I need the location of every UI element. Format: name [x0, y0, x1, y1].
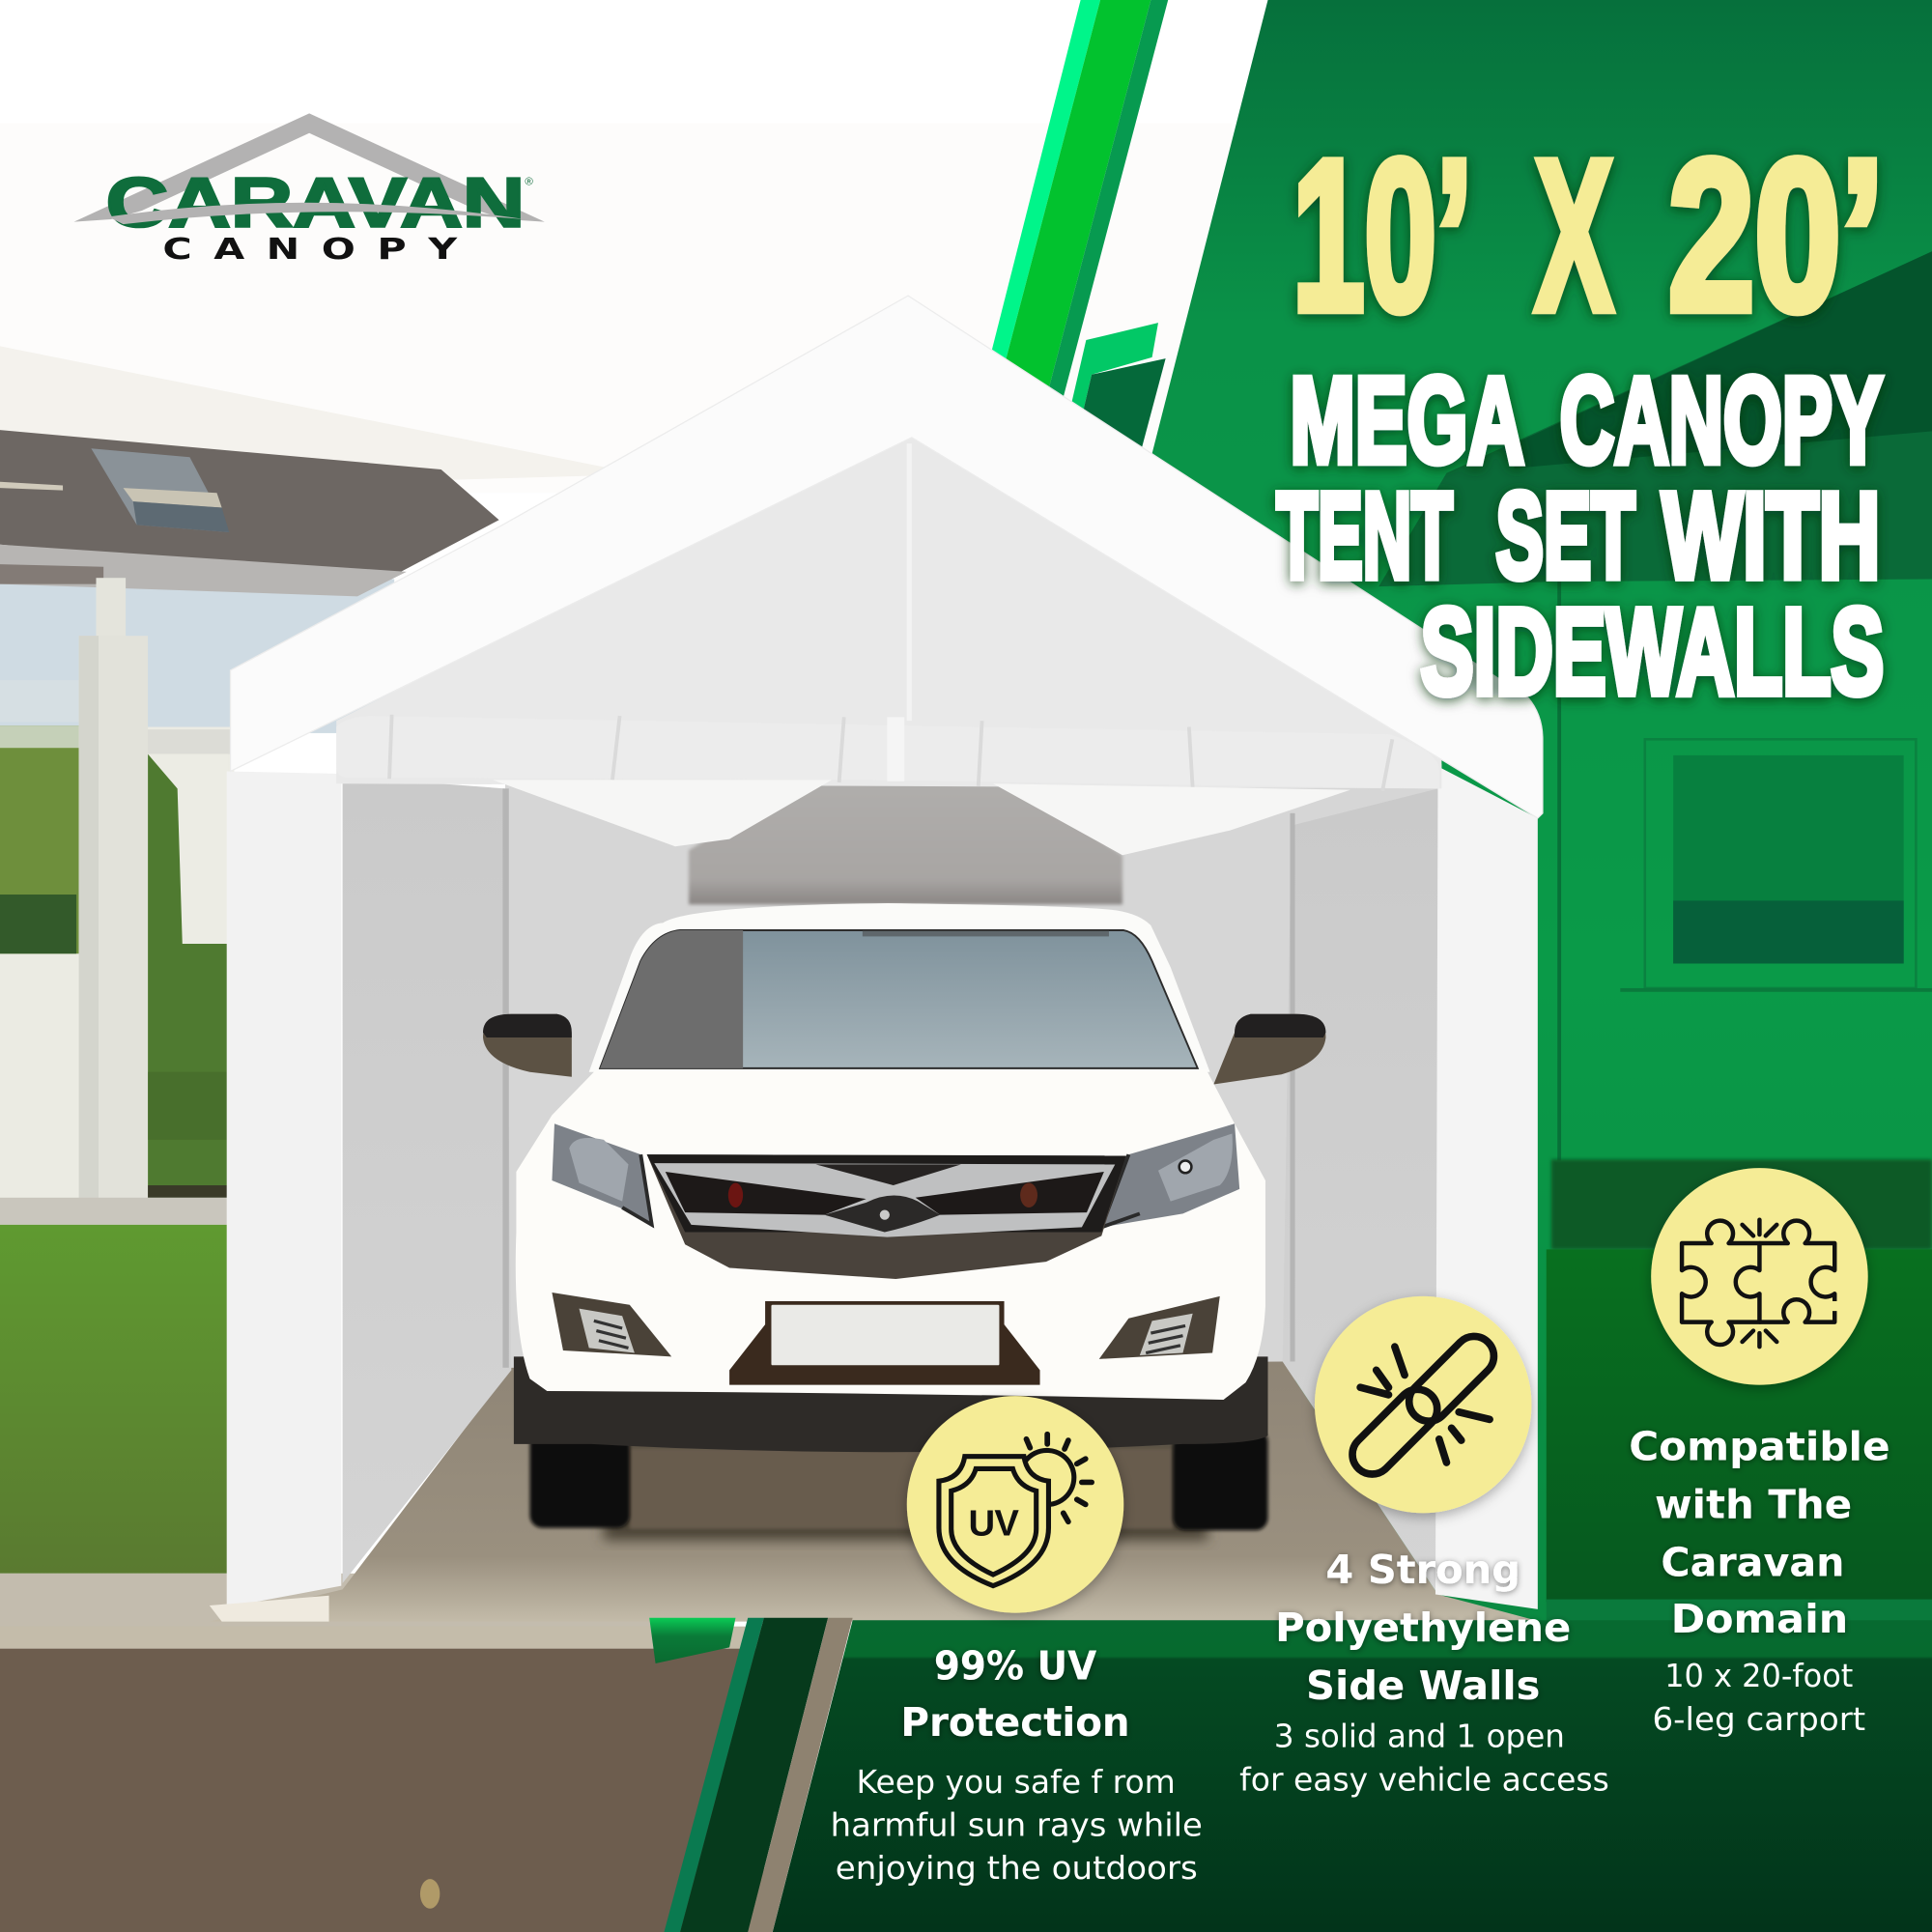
heading: Compatible: [1629, 1423, 1890, 1469]
heading: 99% UV: [934, 1643, 1097, 1690]
sidewalk, kerb and road: [0, 1574, 690, 1628]
green panel: right side background: [1151, 0, 1932, 1627]
house wall: [0, 579, 394, 733]
title: size: [1293, 116, 1884, 355]
roof: [231, 296, 1543, 818]
icon: UV shield and sun: [907, 1396, 1123, 1613]
left front panel: [227, 771, 341, 1605]
description: 6-leg carport: [1652, 1700, 1865, 1738]
description: Keep you safe f rom: [856, 1763, 1176, 1801]
feature: UV protection: [831, 1396, 1203, 1887]
heading: [1275, 1547, 1571, 1709]
bumper: [514, 1356, 1267, 1452]
rolled up door: [336, 716, 1439, 788]
feature: side walls: [1239, 1296, 1609, 1798]
description: 3 solid and 1 open: [1274, 1718, 1565, 1755]
heading: Caravan: [1661, 1539, 1844, 1585]
description: [1239, 1718, 1609, 1798]
tent floor: [210, 1361, 1540, 1622]
icon: puzzle: [1651, 1168, 1868, 1385]
title: product name: TENT: [1276, 468, 1453, 604]
mirrors: [483, 1014, 572, 1077]
window opening and bushes: [0, 725, 79, 953]
back wall: [505, 764, 1441, 1380]
tent canopy: [210, 296, 1543, 1622]
heading: [1629, 1423, 1890, 1642]
valance: [493, 780, 832, 846]
heading: [900, 1643, 1130, 1746]
title: product name: [1276, 352, 1884, 720]
right wall section: [135, 729, 232, 754]
logo subtitle: CANOPY: [162, 231, 458, 266]
fog lights: [552, 1293, 671, 1356]
description: enjoying the outdoors: [836, 1849, 1198, 1887]
shadow and tires: [604, 1441, 1208, 1540]
icon: UV shield and sun: UV: [969, 1502, 1019, 1544]
title: size: 10’: [1293, 116, 1472, 355]
logo wordmark: CARAVAN: [106, 164, 525, 242]
gable fabric: [336, 431, 1441, 788]
grille: [647, 1154, 1126, 1279]
icon: chain link: [1315, 1296, 1531, 1513]
description: [831, 1763, 1203, 1887]
feature: compatibility: [1629, 1168, 1890, 1738]
body: [516, 1069, 1265, 1400]
description: [1652, 1657, 1865, 1738]
description: harmful sun rays while: [831, 1806, 1203, 1844]
heading: Polyethylene: [1275, 1605, 1571, 1651]
path: [0, 1198, 234, 1225]
green accent stripes: [991, 0, 1168, 451]
heading: with The: [1655, 1481, 1852, 1527]
right side wall: [1283, 788, 1438, 1595]
left side wall: [343, 777, 511, 1583]
car: [483, 903, 1325, 1540]
house roof: [0, 430, 499, 579]
windshield: [600, 930, 1198, 1068]
lawn: [0, 1225, 246, 1574]
logo roof: [74, 113, 545, 222]
title: size: X: [1535, 116, 1613, 355]
registered mark: ®: [525, 176, 533, 187]
title: product name: MEGA: [1290, 352, 1524, 488]
heading: 4 Strong: [1325, 1547, 1520, 1593]
heading: Domain: [1671, 1596, 1848, 1642]
logo: [74, 113, 545, 266]
bottom green band: [649, 1618, 1932, 1932]
description: 10 x 20-foot: [1664, 1657, 1853, 1694]
column: [96, 578, 126, 637]
title: product name: SET: [1495, 468, 1635, 604]
right headlight: [1101, 1123, 1239, 1227]
right front panel: [1435, 766, 1538, 1609]
cabin: [589, 903, 1210, 1072]
description: for easy vehicle access: [1239, 1760, 1609, 1798]
heading: Protection: [900, 1699, 1130, 1746]
number plate: [729, 1301, 1040, 1385]
left headlight: [552, 1123, 652, 1225]
heading: Side Walls: [1306, 1662, 1540, 1709]
